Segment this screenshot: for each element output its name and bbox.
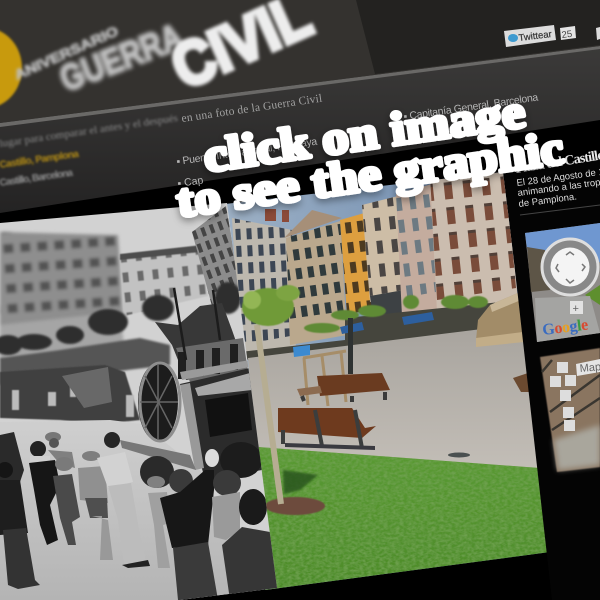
lamp post [348,318,353,374]
icon: raised hand [205,449,219,467]
sapling foliage [242,285,300,326]
logo line: aniversario: ANIVERSARIO [12,23,121,83]
sidebar paragraph: de Pamplona. [518,191,578,210]
truck cab [180,360,262,480]
list item: blurred Barcelona: Castillo, Barcelona [0,168,74,189]
panel: right sidebar [504,148,600,600]
location lists [0,91,539,190]
panel: street view widget [525,223,600,342]
next share button [596,27,600,40]
storefronts [0,338,170,385]
panel: header band [0,0,600,123]
list item: Capitania General: ▪ Capitanía General, Barcelona [403,91,539,123]
intro sentence [0,93,323,150]
front crowd [0,432,279,600]
small bench right [513,373,530,392]
google logo: Google [541,316,589,339]
tweet count: 25 [561,29,573,41]
street view compass ring [542,239,598,295]
bench front [278,408,376,450]
intro sentence: en una foto de la Guerra Civil [181,93,323,125]
plaza pavement [248,330,538,468]
person: boy in cap [53,457,80,545]
street ground [0,420,270,600]
person: left man in jacket [0,480,40,589]
panel: navigation strip [0,48,600,213]
building: beige [284,210,347,345]
list item: Cap: ▪ Cap [177,174,204,190]
twitter label: Twittear [518,29,552,44]
logo title: Guerra Civil [12,0,321,103]
intro sentence: lugar para comparar el antes y el después [0,112,179,150]
logo line: guerra: GUERRA [54,15,188,99]
map roads [542,360,600,430]
header divider line [0,46,600,127]
twitter button [504,25,600,47]
person: man in white shirt [97,432,150,568]
person: small boy [147,476,170,568]
street view road [535,296,600,342]
person: woman waving from behind [160,469,218,600]
gun carriage wheel [138,363,180,441]
sidebar divider [520,205,600,215]
map pan controls [550,362,576,431]
parked car [62,367,112,408]
bench back row [297,373,390,402]
tree row [0,282,241,355]
blue sign [293,345,310,357]
panel: colour photo of the plaza today [220,165,560,600]
drain cover [448,452,470,458]
panel: map widget [540,348,600,472]
building: large with shutters [430,166,518,312]
awnings [340,312,434,334]
light clothes in crowd [12,385,134,417]
blurred background buildings [0,232,124,360]
header right dark texture [356,0,600,74]
person: man in foreground [222,489,279,600]
compass arrows [556,252,585,283]
sapling trunk [257,325,281,504]
street view buildings [527,247,550,292]
building: cream [362,196,402,314]
headline: click on image to see the graphic [173,86,567,228]
carriage tire [140,456,174,488]
building: orange [340,212,372,314]
panel: black and white photo from the Civil War [0,195,290,600]
monument steps [476,292,526,347]
list item: blurred Pamplona: Castillo, Pamplona [0,149,80,171]
tall side building [192,206,242,306]
tree row [304,295,488,333]
headline line one: click on image [200,86,528,183]
map light district [554,425,600,470]
person: woman in black dress [29,441,60,545]
street view sky [525,223,600,272]
ground floor arcade [246,302,496,360]
light corner building [120,245,208,316]
street view grass [585,285,600,305]
person: boy in shirt [78,451,113,560]
list item: Puente Internacional: ▪ Puente Internacional, Hendaya [176,136,318,168]
soldiers on truck [155,288,248,382]
headline line two: to see the graphic [173,122,567,228]
street view compass pad [550,248,590,286]
person: woman with curly hair [212,470,241,540]
building: pink [396,184,438,316]
distant crowd [0,365,140,424]
person: far-left figures [0,432,24,482]
sidebar paragraph [516,165,600,210]
zoom in button: + [572,303,579,315]
mulch bed [265,497,325,515]
building: hotel [232,209,296,358]
grass lawn [258,447,556,600]
icon: gold anniversary circle [0,28,22,108]
tree shadow [283,470,318,494]
tree guard [303,351,346,406]
icon: twitter bird [508,34,518,42]
person: man with cap [45,432,75,468]
gun carriage frame [120,440,196,470]
